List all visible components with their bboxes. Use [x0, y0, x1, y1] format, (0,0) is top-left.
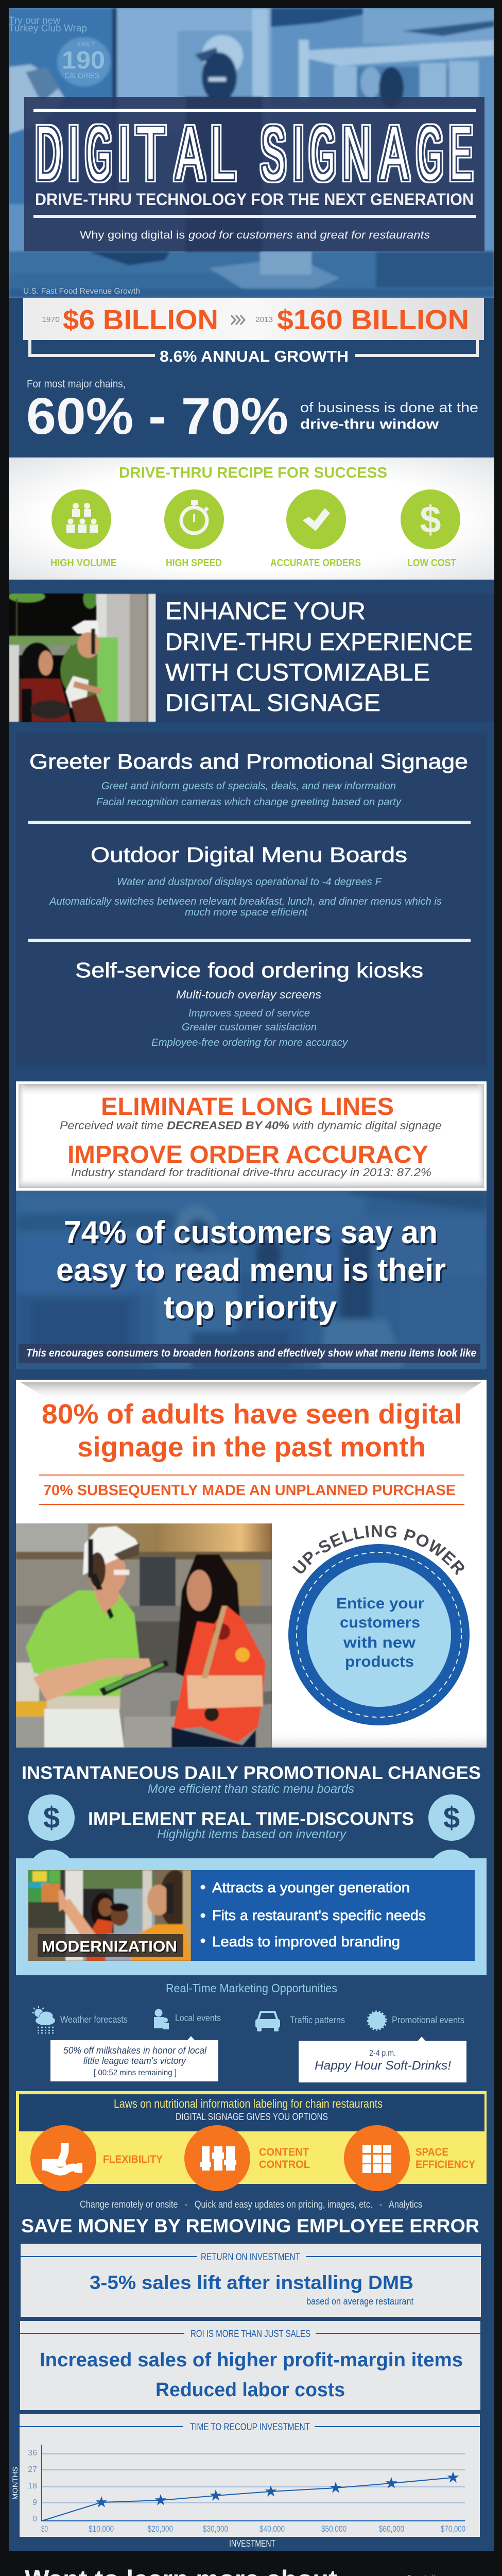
line chart: 36: [28, 2449, 37, 2458]
panel: revenue growth: $6 BILLION: [63, 304, 218, 335]
stat: easy to read menu: easy to read menu is their: [56, 1252, 446, 1288]
panel: adults have seen signage: 80% of adults have seen digital: [42, 1399, 462, 1430]
icon: dollar: $: [420, 498, 441, 541]
greeter boards: Greet and inform guests of specials, deals, and new information: [101, 781, 396, 792]
outdoor menu boards: [49, 843, 442, 918]
title: N: [342, 111, 371, 195]
bullet list box: [191, 1870, 475, 1961]
heading: real time discounts: IMPLEMENT REAL TIME-DISCOUNTS: [88, 1809, 414, 1829]
title: D: [36, 111, 61, 196]
panel: recipe for success: ACCURATE ORDERS: [270, 557, 361, 569]
title: I: [118, 111, 129, 195]
icon: space efficiency: [344, 2125, 410, 2191]
outdoor menu boards: Automatically switches between relevant breakfast, lunch, and dinner menus which is: [49, 896, 442, 907]
panel: enhance experience: [9, 594, 494, 722]
line chart: [28, 2445, 465, 2534]
panel: lines and accuracy: [16, 1081, 487, 1191]
panel: adults have seen signage: signage in the past month: [77, 1432, 426, 1463]
label strip: modernization: [38, 1934, 183, 1957]
label: promotional events: Promotional events: [392, 2015, 464, 2025]
drive-thru share stat: drive-thru window: [300, 416, 439, 432]
heading: enhance experience: WITH CUSTOMIZABLE: [165, 658, 430, 686]
self-service kiosks: Multi-touch overlay screens: [176, 988, 321, 1001]
drive-thru share stat: For most major chains,: [27, 378, 126, 390]
hero photo: tinted staff at counter: [9, 8, 494, 298]
callout: milkshake message: [50, 2036, 218, 2081]
badge: up-selling power: [288, 1525, 470, 1725]
heading: enhance experience: DRIVE-THRU EXPERIENCE: [165, 628, 473, 655]
badge: up-selling power: UP-SELLING POWER: [292, 1525, 464, 1575]
annual growth bracket: [28, 340, 479, 365]
title overlay panel: [24, 97, 484, 251]
heading: promotional changes: INSTANTANEOUS DAILY PROMOTIONAL CHANGES: [22, 1763, 481, 1783]
panel: nutrition labeling options: SPACE: [416, 2146, 448, 2158]
heading: enhance experience: DIGITAL SIGNAGE: [165, 689, 380, 716]
title: T: [136, 111, 165, 195]
stat: easy to read menu: [56, 1215, 447, 1328]
panel: time to recoup investment: [20, 2414, 480, 2537]
icon: dollar right: $: [443, 1801, 460, 1835]
line chart: 18: [28, 2482, 37, 2490]
self-service kiosks: [75, 958, 423, 1048]
label strip: modernization: MODERNIZATION: [43, 1939, 178, 1956]
title: E: [449, 111, 472, 196]
icon: promotional badge: [368, 2011, 386, 2030]
title: G: [86, 111, 112, 195]
callout: milkshake message: little league team's victory: [83, 2056, 186, 2066]
photo: tinted customers at counter: [16, 1191, 487, 1369]
panel: modernization: [16, 1850, 487, 1975]
icon: weather: [32, 2006, 55, 2033]
title: A: [380, 112, 408, 196]
line chart: 0: [32, 2515, 37, 2523]
callout: happy hour message: [299, 2037, 466, 2082]
line chart: $10,000: [89, 2524, 114, 2534]
bullet list box: Fits a restaurant's specific needs: [212, 1907, 426, 1923]
axis label: investment: INVESTMENT: [229, 2538, 275, 2549]
heading: save money: SAVE MONEY BY REMOVING EMPLOYEE ERROR: [21, 2215, 479, 2236]
subtitle: DRIVE-THRU TECHNOLOGY FOR THE NEXT GENERATION: [35, 190, 474, 209]
panel: time to recoup investment: TIME TO RECOUP INVESTMENT: [190, 2422, 310, 2433]
heading: real-time marketing: Real-Time Marketing Opportunities: [166, 1981, 337, 1995]
panel: lines and accuracy: Perceived wait time DECREASED BY 40% with dynamic digital signage: [60, 1119, 442, 1132]
callout: milkshake message: 50% off milkshakes in honor of local: [63, 2045, 207, 2056]
line chart: $40,000: [259, 2524, 285, 2534]
line chart: $70,000: [441, 2524, 465, 2534]
title: I: [293, 111, 304, 195]
outdoor menu boards: Water and dustproof displays operational to -4 degrees F: [117, 876, 383, 888]
panel: adults have seen signage: [16, 1380, 487, 1748]
panel: revenue growth: 2013: [255, 315, 273, 324]
panel: nutrition labeling options: CONTENT: [259, 2146, 309, 2158]
revenue growth label: U.S. Fast Food Revenue Growth: [23, 287, 140, 296]
icon: car: [255, 2011, 280, 2031]
panel: recipe for success: HIGH VOLUME: [50, 557, 117, 569]
stat: easy to read menu: top priority: [164, 1290, 337, 1326]
bullet list box: Attracts a younger generation: [212, 1879, 410, 1895]
bullet list box: Leads to improved branding: [212, 1934, 400, 1950]
panel: nutrition labeling options: DIGITAL SIGNAGE GIVES YOU OPTIONS: [176, 2112, 328, 2123]
title: L: [211, 111, 235, 196]
drive-thru share stat: [26, 378, 478, 445]
panel: recipe for success: DRIVE-THRU RECIPE FOR SUCCESS: [119, 465, 387, 481]
outdoor menu boards: Outdoor Digital Menu Boards: [91, 843, 407, 867]
stat: easy to read menu: 74% of customers say an: [65, 1217, 439, 1252]
hero photo: tinted staff at counter: 190: [62, 47, 105, 74]
panel: lines and accuracy: ELIMINATE LONG LINES: [101, 1093, 394, 1121]
line chart: 9: [32, 2498, 37, 2507]
callout: happy hour message: Happy Hour Soft-Drinks!: [315, 2059, 451, 2073]
drive-thru share stat: of business is done at the: [300, 400, 478, 415]
line chart: $50,000: [321, 2524, 347, 2534]
photo: drive-thru touchscreen: [28, 1870, 191, 1961]
icon: dollar: [401, 489, 460, 549]
icon: check mark: [286, 489, 346, 549]
panel: recipe for success: HIGH SPEED: [166, 557, 222, 569]
badge: up-selling power: products: [345, 1653, 414, 1670]
stat: easy to read menu: 74% of customers say an: [64, 1215, 438, 1250]
label: weather forecasts: Weather forecasts: [60, 2014, 128, 2025]
panel: nutrition labeling options: EFFICIENCY: [416, 2159, 475, 2171]
label strip: modernization: MODERNIZATION: [42, 1938, 177, 1955]
panel: recipe for success: LOW COST: [407, 557, 456, 569]
hero photo: tinted staff at counter: CALORIES: [64, 72, 99, 80]
tagline: Why going digital is good for customers and great for restaurants: [80, 229, 430, 241]
icon: flexibility: [30, 2125, 96, 2191]
annual growth bracket: 8.6% ANNUAL GROWTH: [160, 347, 349, 365]
greeter boards: Greeter Boards and Promotional Signage: [29, 750, 468, 773]
self-service kiosks: Improves speed of service: [188, 1008, 310, 1019]
hero photo: tinted staff at counter: Turkey Club Wrap: [9, 23, 87, 34]
panel: nutrition labeling options: Laws on nutritional information labeling for chain restaurants: [114, 2097, 383, 2110]
icon: high volume: [51, 489, 111, 549]
panel: return on investment: 3-5% sales lift after installing DMB: [90, 2272, 413, 2293]
heading: enhance experience: [165, 597, 473, 716]
heading: promotional changes: [22, 1763, 481, 1796]
icon: dollar right: [428, 1794, 475, 1841]
panel: return on investment: based on average restaurant: [306, 2296, 413, 2307]
hero photo: tinted staff at counter: ONLY: [78, 40, 96, 48]
outdoor menu boards: much more space efficient: [185, 907, 308, 918]
panel: adults have seen signage: 70% SUBSEQUENTLY MADE AN UNPLANNED PURCHASE: [43, 1482, 456, 1499]
features line: Change remotely or onsite - Quick and easy updates on pricing, images, etc. - Analytics: [80, 2199, 422, 2210]
caption strip: [19, 1344, 480, 1363]
label: local events: Local events: [175, 2013, 221, 2023]
line chart: $30,000: [203, 2524, 228, 2534]
panel: nutrition labeling options: [16, 2091, 487, 2191]
rule below subtitle: [33, 215, 476, 218]
panel: revenue growth: $160 BILLION: [277, 304, 469, 335]
panel: signage types: [16, 733, 487, 1065]
line chart: $0: [41, 2524, 48, 2534]
badge: up-selling power: customers: [340, 1614, 420, 1631]
title: A: [176, 112, 203, 196]
callout: happy hour message: 2-4 p.m.: [369, 2049, 396, 2058]
title: G: [417, 111, 443, 195]
self-service kiosks: Self-service food ordering kiosks: [75, 958, 423, 982]
greeter boards: [29, 750, 468, 808]
badge: up-selling power: Entice your: [336, 1595, 424, 1612]
photo: employee with tablet and customer: [16, 1523, 272, 1748]
panel: return on investment: [21, 2244, 481, 2317]
icon: dollar left: $: [43, 1801, 60, 1835]
line chart: $20,000: [148, 2524, 173, 2534]
heading: real time discounts: Highlight items based on inventory: [157, 1827, 347, 1841]
panel: roi beyond sales: Increased sales of higher profit-margin items: [40, 2349, 463, 2371]
title: I: [68, 111, 79, 195]
heading: real time discounts: [88, 1809, 414, 1841]
photo: drive-thru window: [9, 594, 156, 722]
stat: easy to read menu: top priority: [165, 1292, 339, 1328]
icon: stopwatch: [164, 489, 224, 549]
drive-thru share stat: 60% - 70%: [26, 387, 288, 445]
panel: nutrition labeling options: FLEXIBILITY: [103, 2154, 163, 2165]
icon: dollar left: [28, 1794, 75, 1841]
heading: enhance experience: ENHANCE YOUR: [165, 597, 366, 624]
line chart: 27: [28, 2465, 37, 2474]
title: [36, 111, 472, 196]
panel: roi beyond sales: [20, 2321, 480, 2410]
callout: milkshake message: [ 00:52 mins remaining ]: [94, 2069, 177, 2077]
panel: nutrition labeling options: CONTROL: [259, 2159, 310, 2171]
panel: roi beyond sales: ROI IS MORE THAN JUST SALES: [191, 2329, 310, 2340]
self-service kiosks: Employee-free ordering for more accuracy: [151, 1037, 348, 1048]
line chart: $60,000: [379, 2524, 404, 2534]
rule above title: [33, 109, 476, 112]
panel: roi beyond sales: Reduced labor costs: [155, 2379, 345, 2401]
badge: up-selling power: with new: [343, 1634, 416, 1651]
self-service kiosks: Greater customer satisfaction: [182, 1022, 317, 1033]
icon: content control: [184, 2125, 250, 2191]
panel: revenue growth: [23, 298, 484, 340]
axis label: months: MONTHS: [11, 2467, 19, 2500]
panel: lines and accuracy: IMPROVE ORDER ACCURACY: [67, 1141, 428, 1168]
panel: revenue growth: 1970: [42, 315, 60, 324]
icon: local events people: [154, 2009, 169, 2029]
panel: lines and accuracy: Industry standard for traditional drive-thru accuracy in 2013: 87.2%: [71, 1166, 431, 1179]
label: traffic patterns: Traffic patterns: [290, 2015, 345, 2025]
stat: easy to read menu: easy to read menu is their: [58, 1255, 447, 1290]
heading: promotional changes: More efficient than static menu boards: [148, 1782, 354, 1796]
hero photo: tinted staff at counter: Try our new: [9, 15, 60, 26]
title: G: [310, 111, 335, 195]
panel: return on investment: RETURN ON INVESTMENT: [201, 2252, 300, 2263]
panel: recipe for success: [9, 457, 494, 580]
title: S: [261, 112, 285, 196]
greeter boards: Facial recognition cameras which change greeting based on party: [96, 796, 402, 808]
